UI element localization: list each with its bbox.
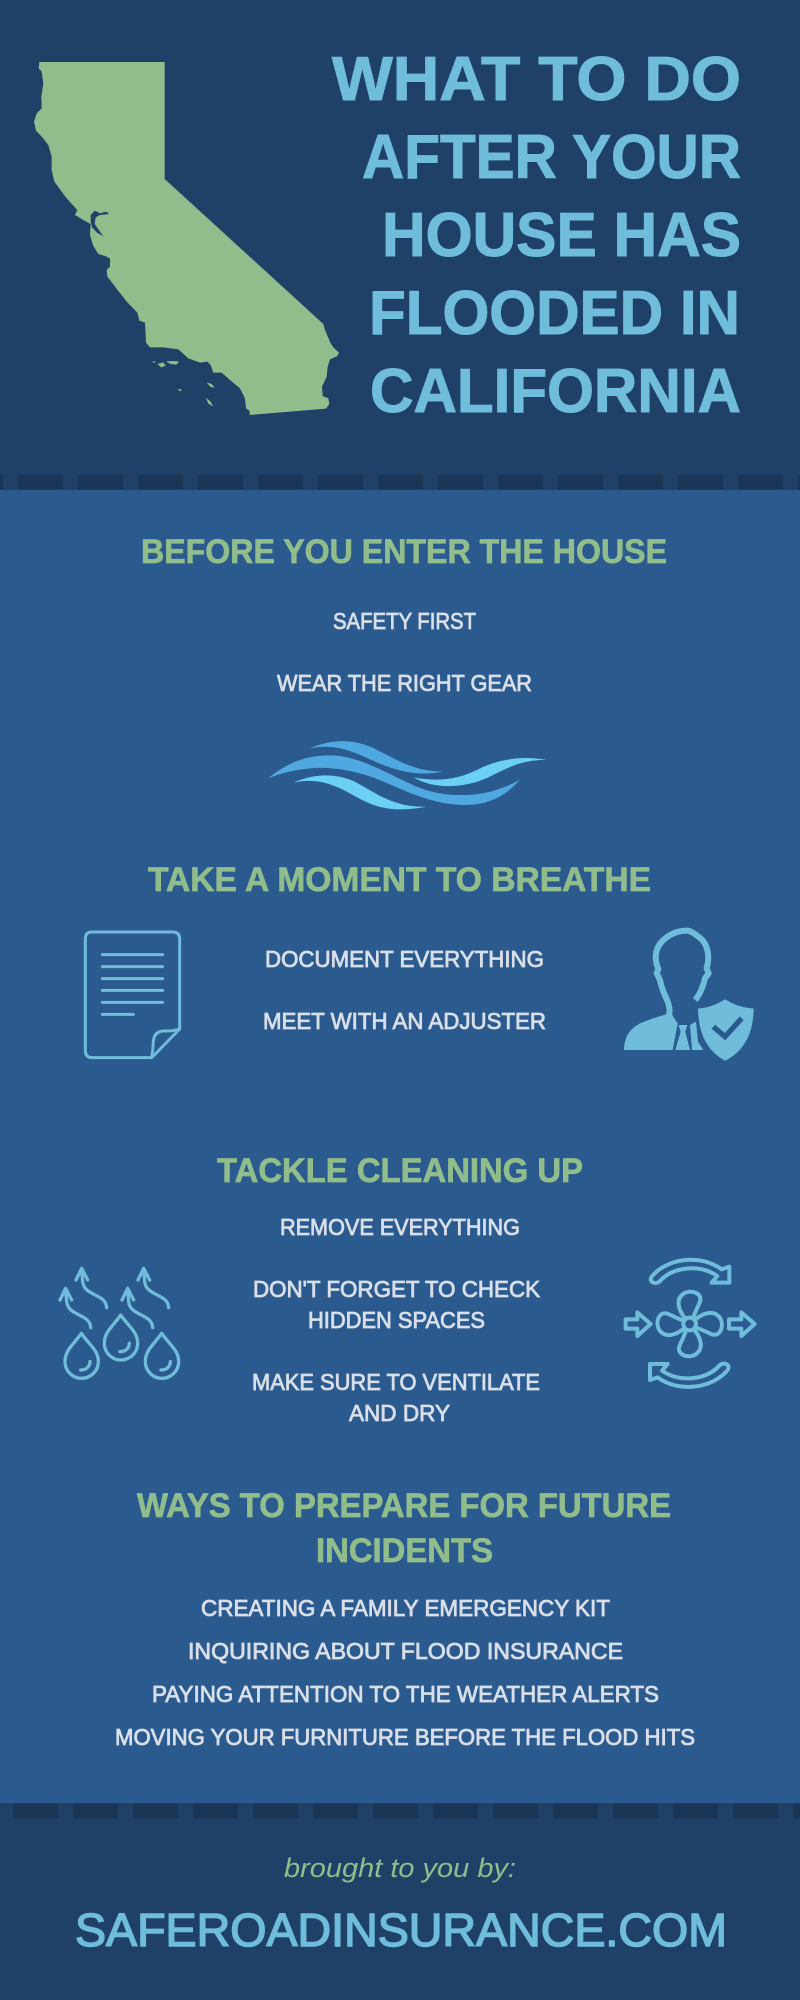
text: safety first: SAFETY FIRST	[333, 608, 476, 634]
section: before you enter the house	[141, 533, 667, 696]
text: ventilate and dry: MAKE SURE TO VENTILATE	[252, 1369, 540, 1395]
text: ventilate and dry: AND DRY	[349, 1400, 450, 1426]
text: flood insurance: INQUIRING ABOUT FLOOD INSURANCE	[188, 1638, 623, 1664]
text: moving furniture: MOVING YOUR FURNITURE BEFORE THE FLOOD HITS	[115, 1724, 695, 1750]
heading	[137, 1487, 671, 1570]
title: WHAT TO DO	[332, 45, 741, 114]
section: tackle cleaning up	[217, 1152, 583, 1426]
text: ventilate and dry	[252, 1369, 540, 1426]
icon: evaporating water drops	[60, 1268, 179, 1378]
text: remove everything: REMOVE EVERYTHING	[280, 1214, 520, 1240]
panel: main content	[0, 490, 800, 1803]
heading: TACKLE CLEANING UP	[217, 1152, 583, 1190]
text: website: SAFEROADINSURANCE.COM	[75, 1904, 727, 1956]
icon: California map	[34, 62, 339, 415]
icon: document	[85, 932, 180, 1058]
section: ways to prepare for future incidents	[115, 1487, 695, 1750]
icon: person with shield	[624, 931, 755, 1062]
text: wear the right gear: WEAR THE RIGHT GEAR	[277, 670, 532, 696]
title: HOUSE HAS	[382, 201, 741, 270]
text: check hidden spaces	[253, 1276, 540, 1333]
section: take a moment to breathe	[148, 861, 651, 1034]
title	[332, 45, 741, 426]
heading: TAKE A MOMENT TO BREATHE	[148, 861, 651, 899]
text: check hidden spaces: DON'T FORGET TO CHECK	[253, 1276, 540, 1302]
title: AFTER YOUR	[362, 123, 741, 192]
heading: WAYS TO PREPARE FOR FUTURE	[137, 1487, 671, 1525]
title: CALIFORNIA	[370, 357, 741, 426]
text: document everything: DOCUMENT EVERYTHING	[265, 946, 544, 972]
panel: header	[0, 0, 800, 475]
text: brought to you by: brought to you by:	[284, 1853, 516, 1883]
icon: ventilation fan	[626, 1260, 755, 1387]
icon: waves	[268, 741, 547, 809]
text: weather alerts: PAYING ATTENTION TO THE WEATHER ALERTS	[152, 1681, 659, 1707]
text: check hidden spaces: HIDDEN SPACES	[308, 1307, 485, 1333]
heading: BEFORE YOU ENTER THE HOUSE	[141, 533, 667, 571]
heading: INCIDENTS	[316, 1532, 493, 1570]
title: FLOODED IN	[369, 279, 740, 348]
panel: footer	[75, 1853, 727, 1956]
text: meet with an adjuster: MEET WITH AN ADJUSTER	[263, 1008, 546, 1034]
text: family emergency kit: CREATING A FAMILY EMERGENCY KIT	[201, 1595, 610, 1621]
